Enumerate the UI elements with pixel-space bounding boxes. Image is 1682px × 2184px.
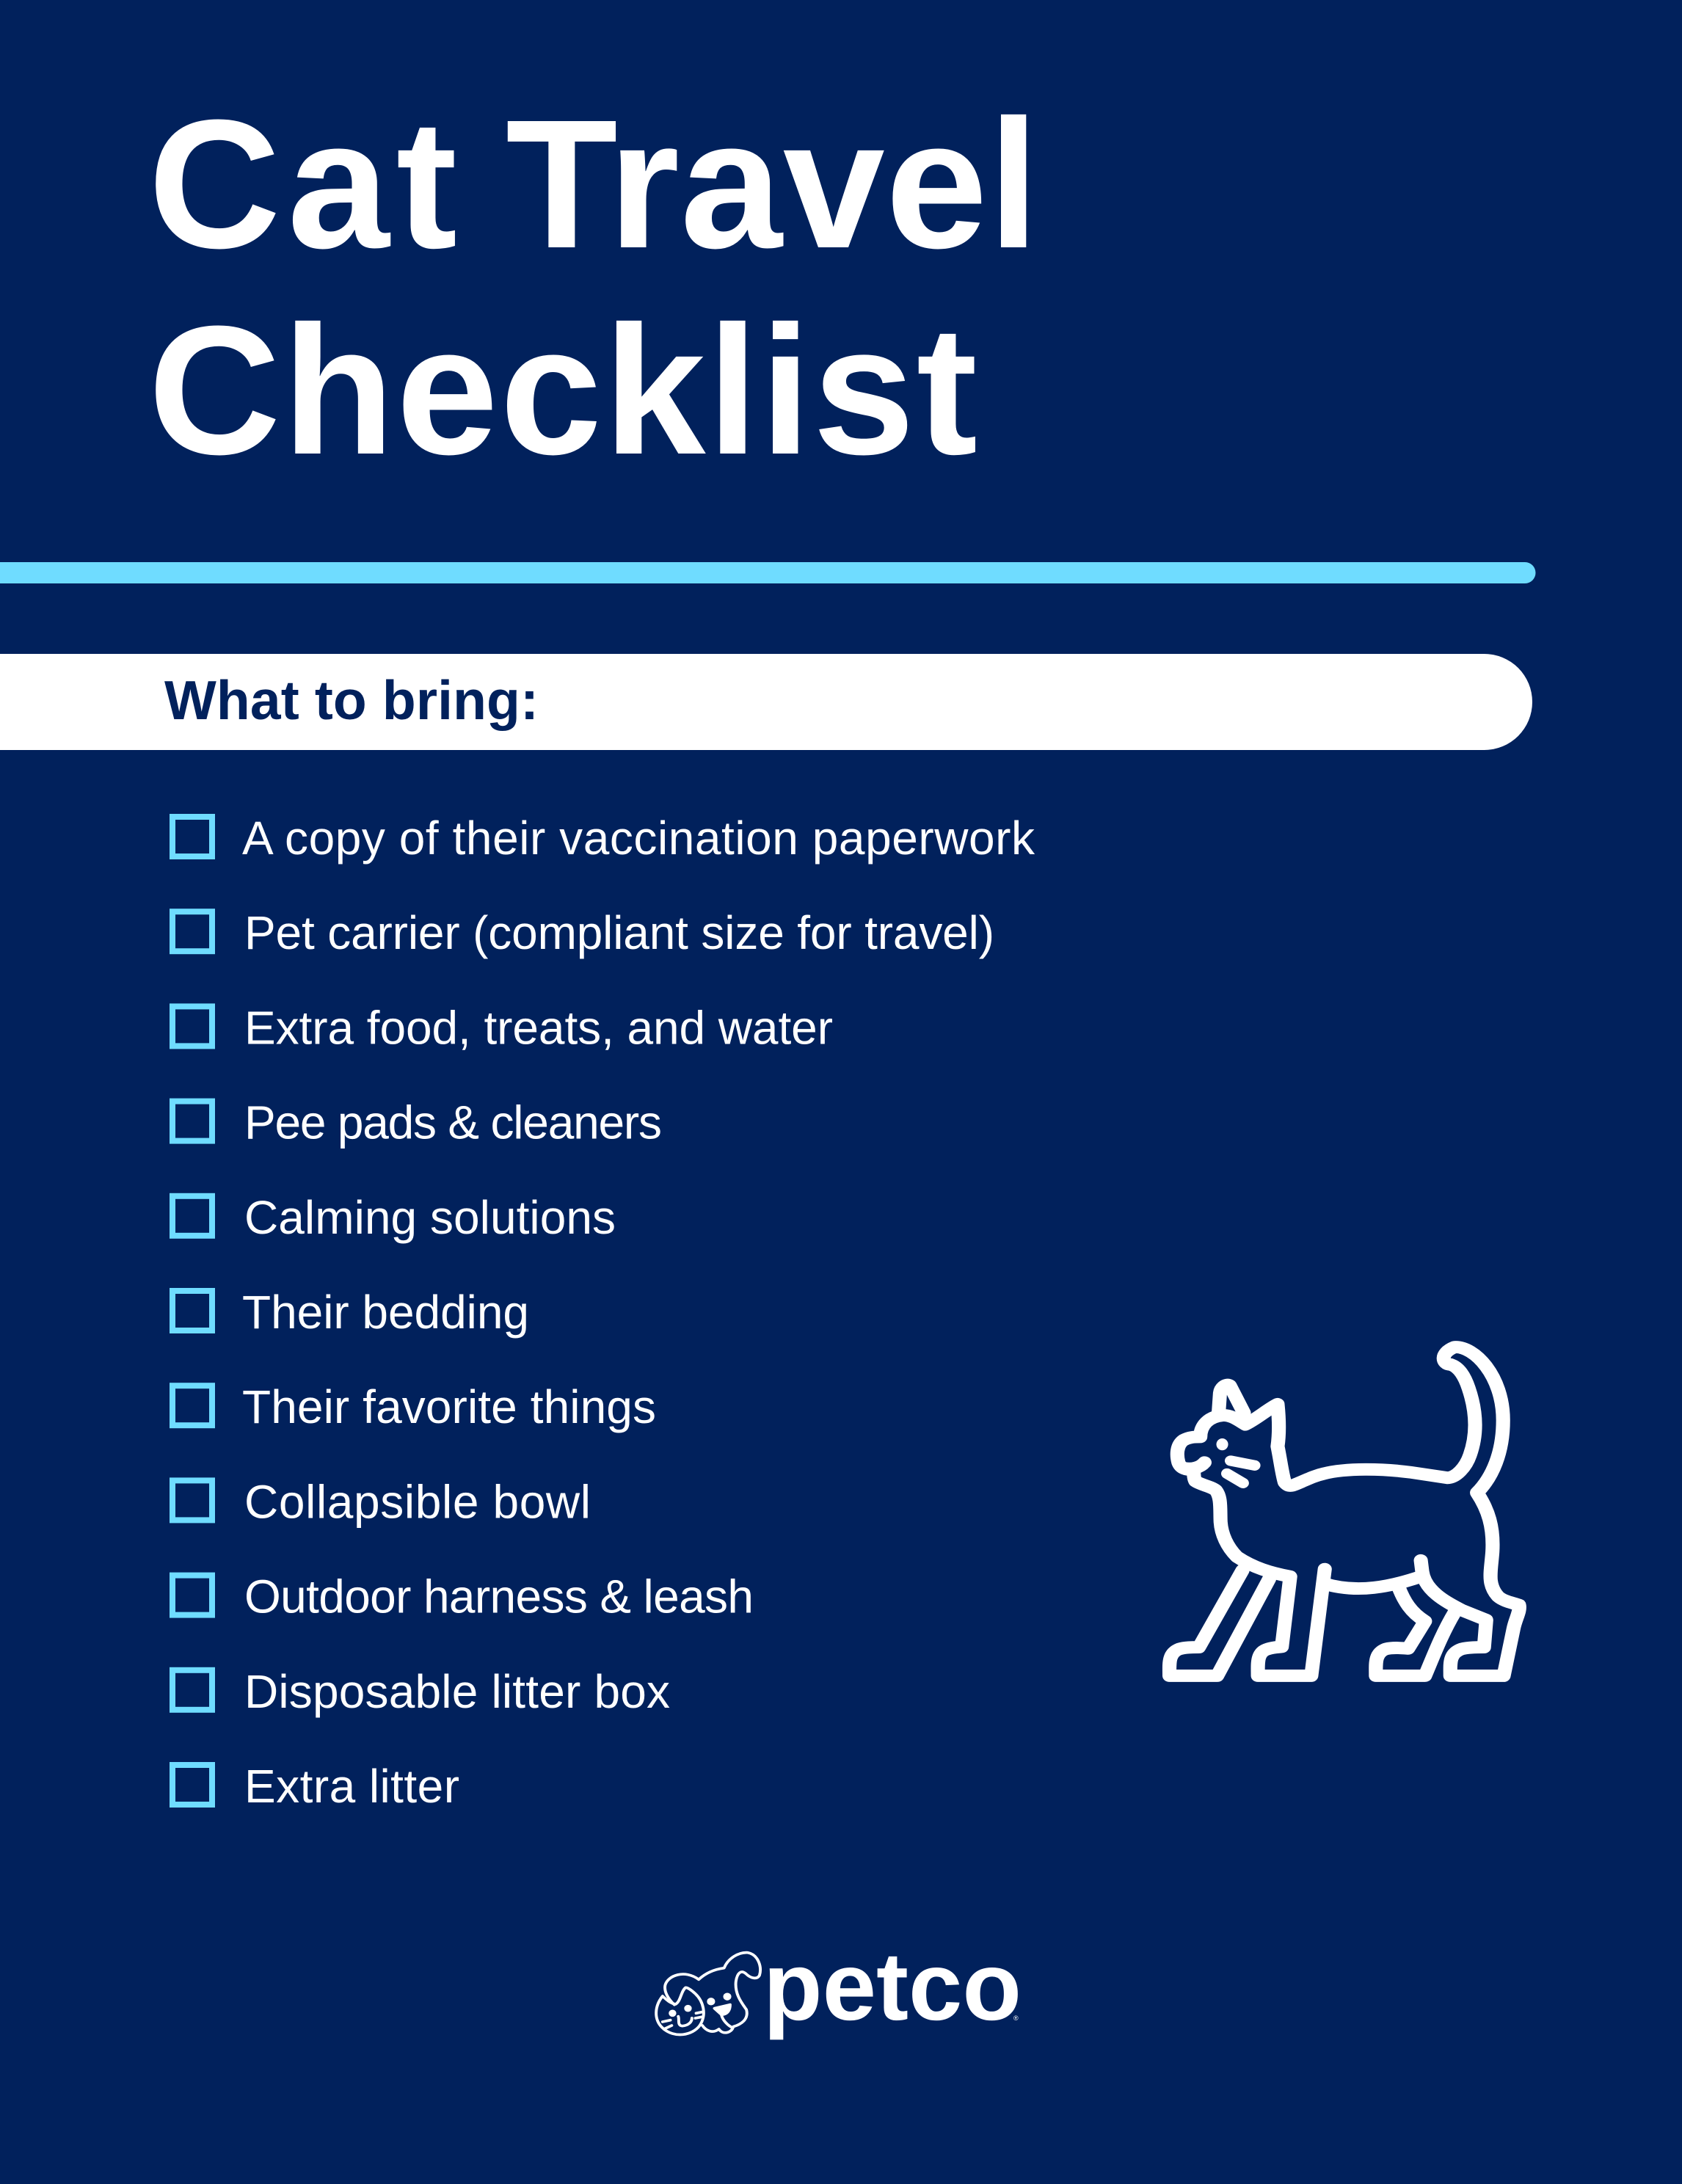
petco logo (656, 1932, 1022, 2040)
banner: what to bring: What to bring: (164, 669, 539, 731)
banner: what to bring (0, 654, 1532, 750)
checklist (172, 812, 1035, 1813)
item: pee pads: Pee pads & cleaners (244, 1096, 662, 1149)
icon: cat (1170, 1347, 1519, 1675)
item: pet carrier: Pet carrier (compliant size for travel) (244, 906, 994, 959)
item: food, treats, water: Extra food, treats, and water (244, 1001, 833, 1054)
item: vaccination paperwork: A copy of their vaccination paperwork (242, 812, 1035, 864)
item: extra litter: Extra litter (244, 1760, 459, 1813)
registered mark: ® (1013, 2014, 1019, 2022)
item: favorite things: Their favorite things (242, 1380, 656, 1433)
title (148, 81, 1039, 492)
cyan divider bar (0, 562, 1535, 583)
item: bedding: Their bedding (242, 1286, 529, 1339)
title: Cat (148, 81, 457, 286)
item: calming solutions: Calming solutions (244, 1191, 616, 1244)
item: disposable litter box: Disposable litter box (244, 1665, 670, 1718)
item: harness and leash: Outdoor harness & leash (244, 1570, 754, 1623)
item: collapsible bowl: Collapsible bowl (244, 1475, 591, 1528)
title: Travel (506, 81, 1039, 286)
wordmark: petco (763, 1932, 1022, 2040)
icon: cat and dog faces (656, 1953, 760, 2035)
title: Checklist (148, 288, 977, 492)
